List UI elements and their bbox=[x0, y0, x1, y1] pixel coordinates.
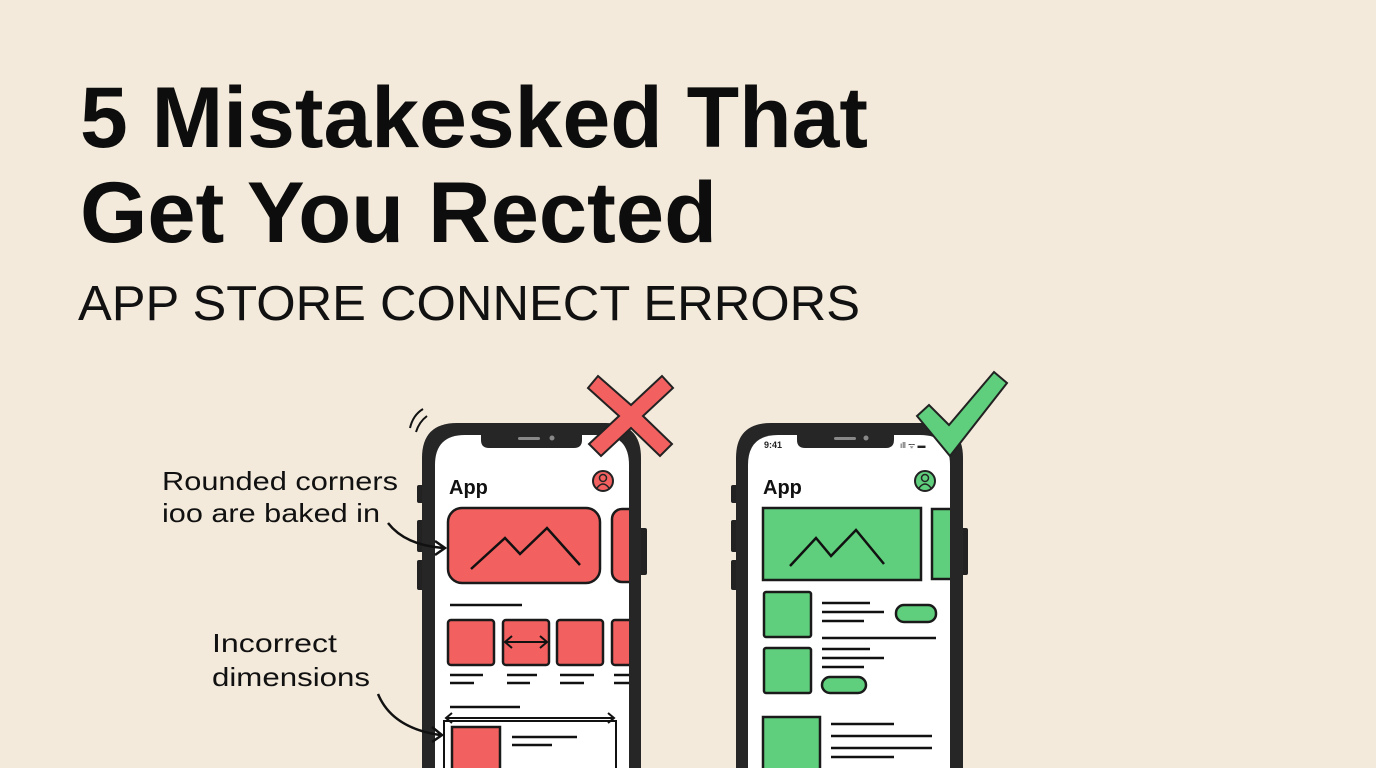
phone: correct: App bbox=[763, 477, 802, 499]
callout: incorrect dimensions bbox=[212, 628, 442, 742]
callout: rounded corners bbox=[162, 466, 445, 555]
phone: incorrect: App bbox=[449, 477, 488, 499]
phone: incorrect bbox=[410, 409, 647, 768]
callout: incorrect dimensions: Incorrect bbox=[212, 628, 338, 658]
title bbox=[80, 70, 868, 261]
callout: rounded corners: ioo are baked in bbox=[162, 498, 380, 528]
phone: correct: ıll ᯤ ▬ bbox=[900, 441, 926, 450]
subtitle: APP STORE CONNECT ERRORS bbox=[78, 277, 860, 331]
callout: incorrect dimensions: dimensions bbox=[212, 662, 370, 692]
callout: rounded corners: Rounded corners bbox=[162, 466, 398, 496]
phone: correct bbox=[731, 423, 968, 768]
icon: green check bbox=[917, 372, 1007, 456]
phone: correct: 9:41 bbox=[764, 440, 782, 450]
title: 5 Mistakesked That bbox=[80, 70, 868, 166]
icon: red X bbox=[588, 376, 673, 456]
title: Get You Rected bbox=[80, 165, 717, 261]
